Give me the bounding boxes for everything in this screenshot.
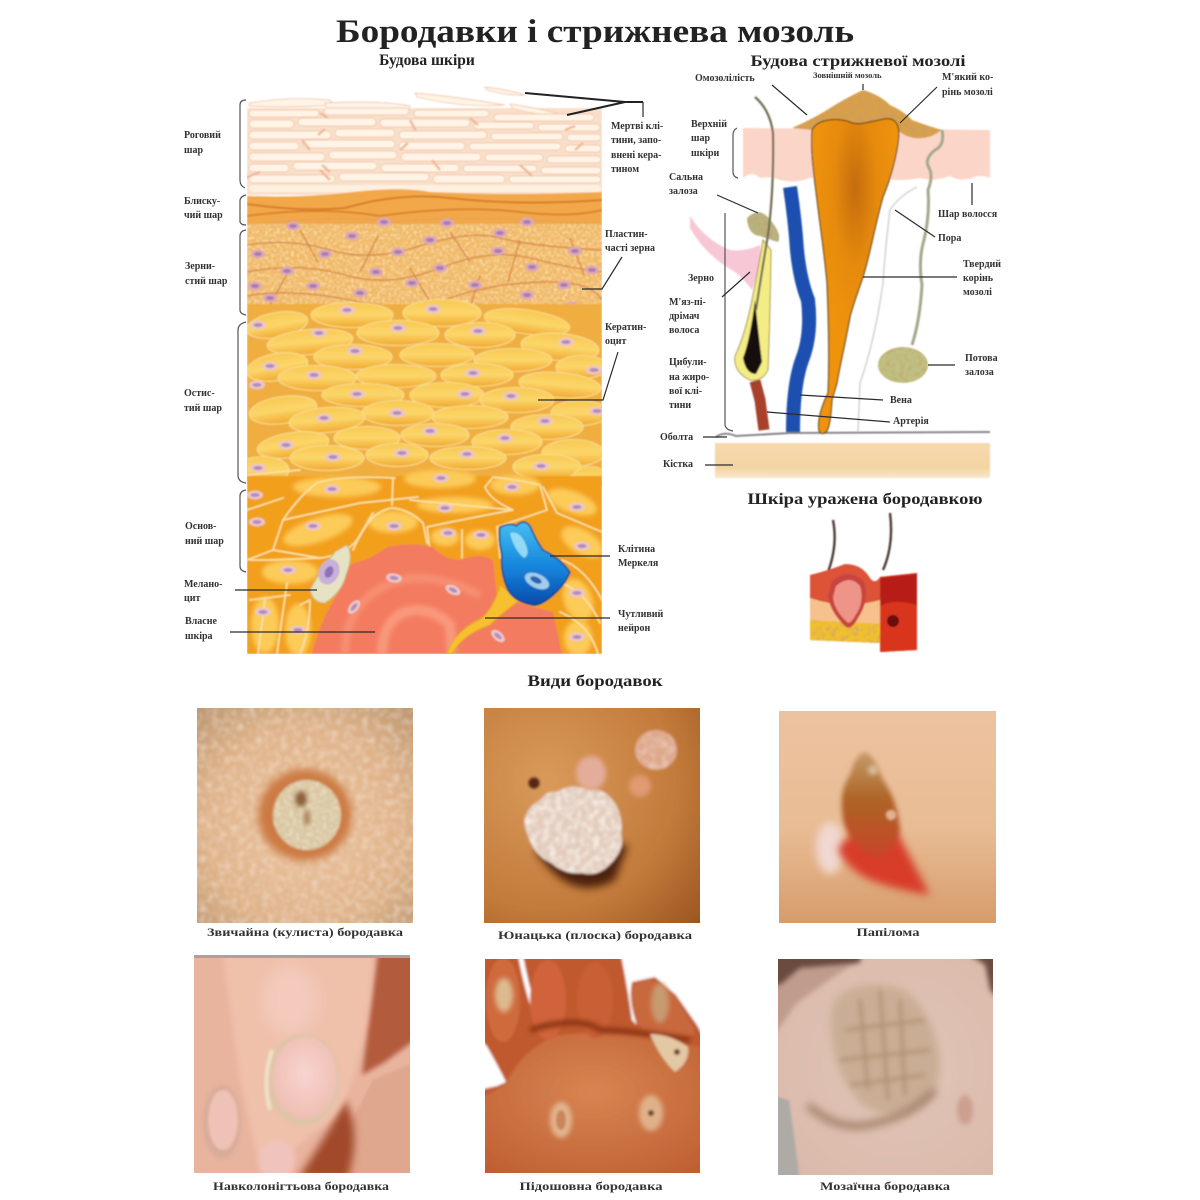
spinous layer — [237, 300, 609, 494]
label: lamellar granules: часті зерна — [605, 243, 655, 254]
label: hard corn root: мозолі — [963, 287, 992, 298]
label: upper skin layer: шкіри — [691, 148, 720, 159]
Merkel cell — [499, 522, 570, 605]
heading: types of warts: Види бородавок — [528, 673, 663, 690]
label: clear layer: Блиску- — [184, 196, 220, 207]
label: dermis: Власне — [185, 616, 217, 627]
caption: common wart: Звичайна (кулиста) бородавка — [207, 927, 403, 939]
thin nerve — [858, 187, 917, 432]
labels: skin layers: шар — [184, 145, 203, 156]
photo: common wart — [197, 708, 413, 923]
pink muscle — [690, 216, 760, 290]
title: Бородавки і стрижнева мозоль — [336, 14, 854, 50]
labels: skin layers: Роговий — [184, 130, 221, 141]
icon: skin block with wart — [810, 513, 917, 652]
heading: skin affected by wart: Шкіра уражена бородавкою — [748, 491, 983, 508]
label: sebaceous gland: Сальна — [669, 172, 703, 183]
toes — [486, 958, 520, 1042]
label: upper skin layer: Верхній — [691, 119, 727, 130]
hair root — [743, 300, 762, 374]
callus mound — [792, 90, 942, 138]
label: hair muscle: М'яз-пі- — [669, 297, 706, 308]
label: sweat gland: залоза — [965, 367, 994, 378]
sole — [485, 1032, 700, 1173]
photo: flat wart — [484, 708, 700, 923]
artery — [755, 381, 764, 430]
sweat duct — [912, 130, 943, 345]
white background and toe gaps — [619, 959, 700, 1036]
melanocyte — [310, 545, 350, 603]
label: soft corn root: рінь мозолі — [942, 87, 993, 98]
leader lines: corn diagram — [703, 84, 972, 465]
basal layer — [247, 470, 608, 656]
caption: mosaic wart: Мозаїчна бородавка — [820, 1181, 950, 1193]
heading: skin structure: Будова шкіри — [379, 52, 475, 69]
label: keratinocyte: оцит — [605, 336, 627, 347]
label: lamellar granules: Пластин- — [605, 229, 648, 240]
caption: papilloma: Папілома — [856, 927, 920, 939]
label: clear layer: чий шар — [184, 210, 223, 221]
plantar warts — [495, 978, 513, 1012]
label: keratinocyte: Кератин- — [605, 322, 646, 333]
label: dermis: шкіра — [185, 631, 213, 642]
label: hard corn root: Твердий — [963, 259, 1001, 270]
horny layer — [245, 86, 602, 195]
label: melanocyte: Мелано- — [184, 579, 222, 590]
label: granular layer: стий шар — [185, 276, 228, 287]
panel: skin cross-section illustration — [237, 86, 609, 656]
label: sweat gland: Потова — [965, 353, 998, 364]
brackets: skin layers — [238, 100, 246, 572]
caption: periungual wart: Навколонігтьова бородавка — [213, 1181, 389, 1193]
label: hard corn root: корінь — [963, 273, 994, 284]
photo: papilloma — [779, 711, 996, 923]
label: Merkel cell: Меркеля — [618, 558, 659, 569]
granular layer — [247, 216, 602, 305]
label: dead cells: тином — [611, 164, 639, 175]
bracket: deep tissue and upper skin — [725, 128, 738, 431]
hair follicle — [735, 240, 771, 380]
panel: corn diagram — [690, 90, 990, 478]
label: dead cells: Мертві клі- — [611, 121, 663, 132]
label: grain: Зерно — [688, 273, 714, 284]
caption: flat wart: Юнацька (плоска) бородавка — [498, 930, 692, 942]
label: hair muscle: дрімач — [669, 311, 700, 322]
label: hair muscle: волоса — [669, 325, 699, 336]
photo: periungual wart — [194, 955, 410, 1173]
bone — [715, 443, 990, 478]
label: spinous layer: тий шар — [184, 403, 222, 414]
label: granular layer: Зерни- — [185, 261, 215, 272]
label: Merkel cell: Клітина — [618, 544, 655, 555]
label: artery: Артерія — [893, 416, 929, 427]
fascia — [716, 432, 990, 437]
label: bone: Кістка — [663, 459, 693, 470]
label: sensory neuron: нейрон — [618, 623, 651, 634]
dermis — [312, 544, 562, 654]
label: dead cells: внені кера- — [611, 150, 661, 161]
label: bulb: вої клі- — [669, 386, 702, 397]
label: spinous layer: Остис- — [184, 388, 215, 399]
label: sheath: Оболта — [660, 432, 693, 443]
label: sebaceous gland: залоза — [669, 186, 698, 197]
label: bulb: Цибули- — [669, 357, 707, 368]
hard corn root — [811, 119, 899, 433]
upper skin layer — [743, 128, 990, 182]
caption: plantar wart: Підошовна бородавка — [520, 1181, 663, 1193]
label: bulb: тини — [669, 400, 691, 411]
label: callus: Омозолілість — [695, 73, 755, 84]
label: bulb: на жиро- — [669, 372, 709, 383]
label: soft corn root: М'який ко- — [942, 72, 993, 83]
label: hair layer: Шар волосся — [938, 209, 998, 220]
vein — [790, 187, 809, 432]
label: melanocyte: цит — [184, 593, 201, 604]
sebaceous gland — [747, 212, 779, 242]
label: basal layer: Основ- — [185, 521, 216, 532]
label: pore: Пора — [938, 233, 961, 244]
label: vein: Вена — [890, 395, 912, 406]
sweat gland — [878, 347, 928, 383]
photo: mosaic wart — [778, 959, 993, 1175]
clear layer — [247, 188, 602, 225]
hair shaft — [755, 97, 773, 310]
label: dead cells: тини, запо- — [611, 135, 661, 146]
heading: corn structure: Будова стрижневої мозолі — [750, 53, 966, 70]
leader lines: skin panel — [230, 93, 643, 632]
label: outer corn: Зовнішній мозоль — [813, 70, 882, 80]
label: upper skin layer: шар — [691, 133, 710, 144]
photo: plantar wart — [485, 959, 700, 1173]
label: basal layer: ний шар — [185, 536, 224, 547]
label: sensory neuron: Чутливий — [618, 609, 664, 620]
